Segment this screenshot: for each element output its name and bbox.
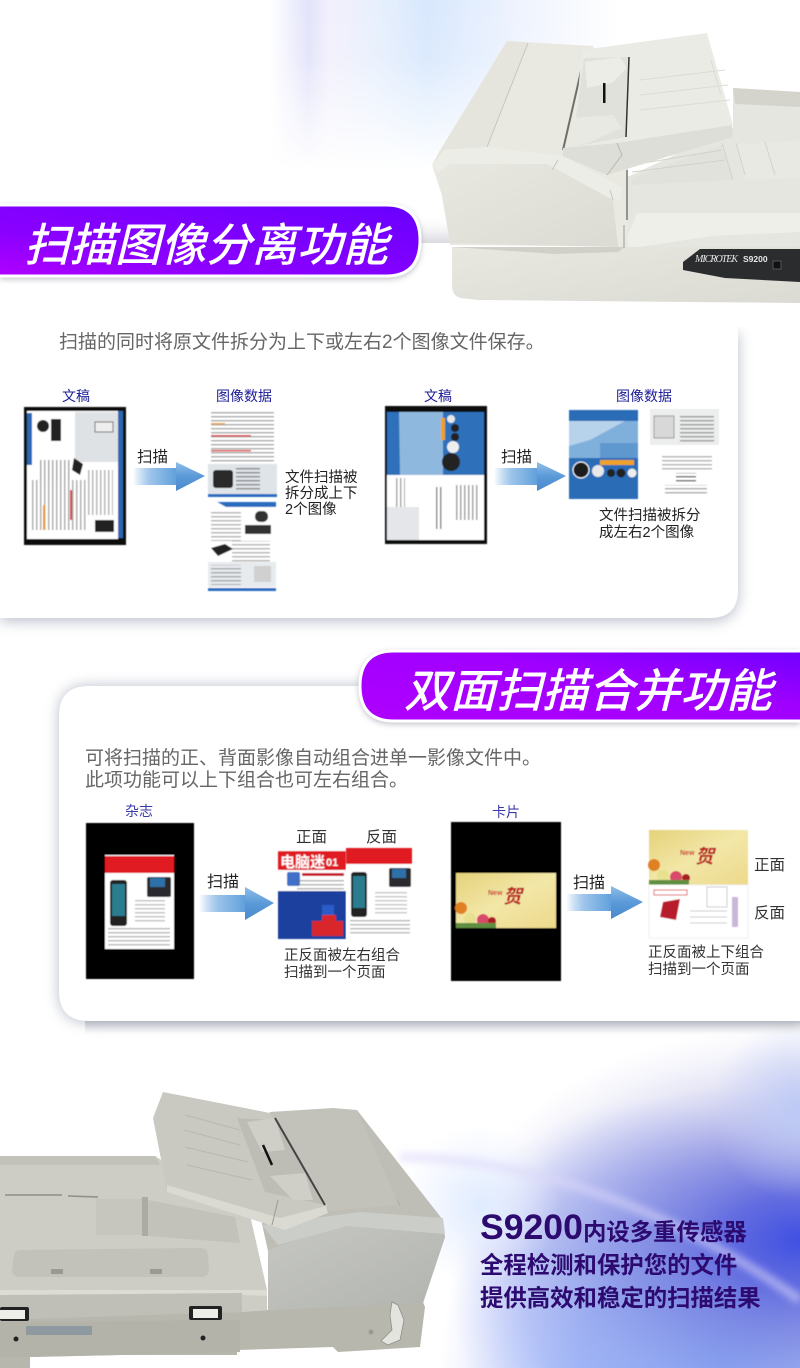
document: card on black: New [488, 890, 503, 897]
page: card front: New [680, 850, 695, 857]
caption: 扫描到一个页面 [648, 961, 750, 978]
page: right half [650, 409, 719, 499]
arrow [494, 462, 566, 491]
band behind heading [410, 215, 470, 243]
page: top half [208, 408, 277, 497]
text: sensor statement [480, 1207, 761, 1311]
page: front cover [278, 848, 346, 939]
heading: image separation [0, 205, 420, 276]
caption: 2个图像 [285, 501, 337, 518]
text: separation description: 扫描的同时将原文件拆分为上下或左右2个图像文件保存。 [59, 331, 545, 353]
label: front: 正面 [754, 857, 785, 874]
panel: duplex merge card [59, 686, 800, 1022]
caption [284, 947, 400, 981]
heading: duplex merge: 双面扫描合并功能 [404, 665, 777, 717]
control panel: MICROTEK [694, 254, 739, 265]
latch [381, 1302, 404, 1345]
arrow [566, 886, 643, 919]
label: image data: 图像数据 [216, 388, 272, 404]
label: magazine: 杂志 [125, 803, 153, 819]
text: duplex description [85, 747, 541, 791]
icon: flatbed scanner bottom [0, 1092, 445, 1368]
label: scan: 扫描 [573, 874, 605, 892]
caption [648, 944, 764, 978]
text: sensor statement: 内设多重传感器 [583, 1218, 747, 1245]
document: brochure original [385, 406, 487, 544]
caption [285, 469, 358, 518]
diagram: magazine merge [86, 803, 412, 981]
document: magazine on black [86, 823, 194, 979]
caption: 拆分成上下 [285, 485, 358, 502]
label: card: 卡片 [492, 804, 520, 820]
caption [599, 507, 700, 541]
label: scan: 扫描 [137, 448, 168, 466]
caption: 正反面被上下组合 [648, 944, 764, 961]
text: duplex description: 此项功能可以上下组合也可左右组合。 [85, 769, 408, 791]
heading: duplex merge [360, 651, 800, 721]
caption: 文件扫描被 [285, 469, 358, 486]
caption: 文件扫描被拆分 [599, 507, 700, 524]
label: back: 反面 [754, 904, 785, 922]
icon: flatbed scanner top [432, 33, 800, 303]
heading: image separation: 扫描图像分离功能 [24, 220, 394, 271]
control panel: S9200 [743, 254, 768, 264]
diagram: card merge [451, 804, 785, 981]
text: sensor statement: 全程检测和保护您的文件 [480, 1251, 737, 1278]
page: card front: 贺 [695, 846, 717, 868]
text: sensor statement: S9200 [480, 1207, 583, 1247]
page: card front [648, 830, 748, 885]
text: duplex description: 可将扫描的正、背面影像自动组合进单一影像文件中。 [85, 747, 541, 769]
page: bottom half [208, 502, 276, 591]
page: front cover: 电脑迷 [280, 853, 325, 871]
page: left half [569, 410, 638, 499]
page: front cover: 01 [326, 857, 338, 869]
diagram: split left and right [385, 388, 719, 544]
document: card on black: 贺 [503, 886, 525, 908]
label: back: 反面 [366, 828, 397, 846]
caption: 成左右2个图像 [599, 524, 695, 541]
page: card back [649, 885, 748, 938]
document: card on black [451, 822, 561, 981]
label: original: 文稿 [62, 388, 90, 404]
text: sensor statement: 提供高效和稳定的扫描结果 [480, 1285, 761, 1311]
label: front: 正面 [296, 829, 327, 846]
control panel [683, 249, 800, 282]
connector: left [0, 1307, 29, 1321]
caption: 扫描到一个页面 [284, 964, 386, 981]
panel: image separation card [0, 243, 800, 621]
page: back cover [346, 848, 412, 939]
label: image data: 图像数据 [616, 388, 672, 404]
rating label [26, 1326, 92, 1335]
label: scan: 扫描 [501, 448, 532, 466]
label: original: 文稿 [424, 388, 452, 404]
arrow [133, 462, 205, 491]
caption: 正反面被左右组合 [284, 947, 400, 964]
document: landscape original [24, 407, 126, 545]
bottom background gradient [85, 1021, 800, 1368]
label: scan: 扫描 [207, 873, 239, 891]
arrow [199, 887, 274, 920]
connector: right [189, 1306, 222, 1320]
diagram: split top and bottom [24, 388, 358, 591]
